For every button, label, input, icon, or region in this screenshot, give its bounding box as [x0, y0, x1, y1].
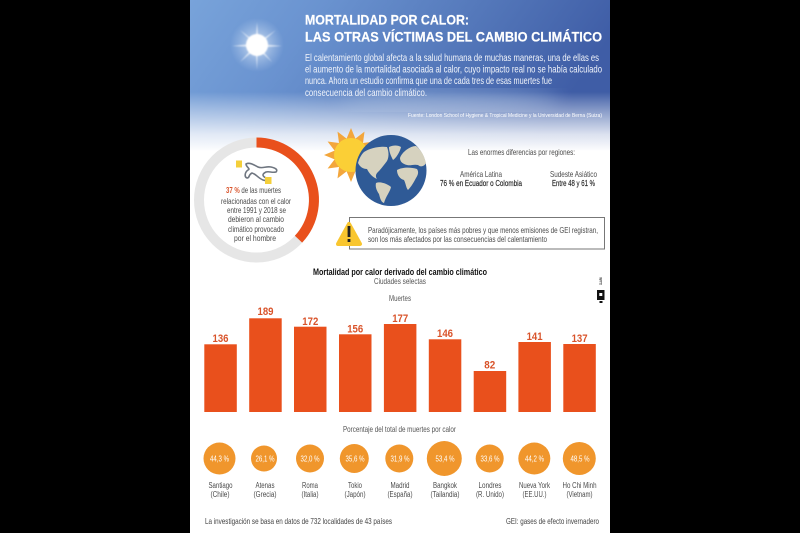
icon: globe — [356, 135, 426, 206]
bubble chart: percentage of heat deaths — [204, 441, 596, 499]
city labels: Atenas — [256, 481, 274, 490]
chart heading: Mortalidad por calor derivado del cambio climático — [313, 267, 487, 277]
bar values: 137 — [572, 333, 588, 345]
city labels: Tokio — [348, 481, 362, 490]
bar values: 156 — [347, 324, 363, 336]
donut caption: por el hombre — [234, 233, 276, 243]
intro text block: consecuencia del cambio climático. — [305, 87, 427, 99]
icon: sun and globe — [324, 128, 426, 206]
bar values: 82 — [484, 360, 495, 372]
chart heading: Ciudades selectas — [374, 276, 426, 286]
sky header panel — [190, 0, 610, 152]
donut caption: climático provocado — [228, 224, 284, 234]
source note: Fuente: London School of Hygiene & Tropical Medicine y la Universidad de Berna (Suiza) — [408, 113, 602, 119]
percentage heading: Porcentaje del total de muertes por calor — [343, 424, 456, 434]
bubble values: 31,9 % — [390, 454, 410, 464]
icon: sun in the sky — [230, 18, 284, 72]
city labels: (EE.UU.) — [522, 490, 547, 499]
bubble values: 44,3 % — [210, 454, 229, 464]
bubble values: 53,4 % — [436, 454, 454, 464]
footer note: methodology: La investigación se basa en datos de 732 localidades de 43 países — [205, 516, 392, 526]
region: América Latina: América Latina — [460, 169, 502, 179]
donut caption: entre 1991 y 2018 se — [227, 205, 286, 215]
bar values: 177 — [392, 313, 408, 325]
bubble values — [210, 454, 590, 464]
bar values: 146 — [437, 328, 453, 340]
bubble values: 33,6 % — [480, 454, 500, 464]
donut caption: relacionadas con el calor — [221, 196, 291, 206]
city labels: Roma — [302, 481, 318, 490]
chart heading — [313, 267, 487, 303]
bubble values: 26,1 % — [256, 454, 274, 464]
city labels: Ho Chi Minh — [562, 481, 596, 490]
bubble values: 48,5 % — [570, 454, 590, 464]
donut chart: 37 % — [199, 142, 314, 258]
bar values: 172 — [302, 316, 318, 328]
title: MORTALIDAD POR CALOR: — [305, 12, 469, 28]
intro text block: nunca. Ahora un estudio confirma que una de cada tres de esas muertes fue — [305, 75, 552, 87]
icon: sun — [324, 128, 378, 182]
intro text block — [305, 52, 602, 99]
callout text: son los más afectados por las consecuencias del calentamiento — [368, 234, 547, 244]
icon: warning triangle — [338, 224, 360, 244]
intro text block: El calentamiento global afecta a la salud humana de muchas maneras, una de ellas es — [305, 52, 599, 64]
title — [305, 12, 602, 44]
footer note: GEI definition: GEI: gases de efecto invernadero — [506, 516, 599, 526]
city labels: (Grecia) — [254, 490, 277, 499]
city labels: Santiago — [208, 481, 233, 490]
city labels: Madrid — [390, 481, 410, 490]
bubble values: 32,0 % — [300, 454, 320, 464]
city labels: (Italia) — [302, 490, 319, 499]
bar values — [212, 306, 588, 372]
city labels: Londres — [478, 481, 502, 490]
city labels: Bangkok — [433, 481, 458, 490]
bubble values: 44,2 % — [525, 454, 544, 464]
city labels: (R. Unido) — [476, 490, 504, 499]
bar values: 141 — [527, 331, 543, 343]
logo mark — [597, 277, 604, 303]
page background panel — [190, 0, 610, 533]
chart heading: Muertes — [389, 293, 411, 303]
region: Sudeste Asiático: Entre 48 y 61 % — [552, 178, 595, 188]
donut caption — [221, 185, 291, 243]
bar values: 189 — [258, 306, 274, 318]
donut caption: debieron al cambio — [228, 214, 284, 224]
city labels: (Vietnam) — [566, 490, 593, 499]
icon: body outline with evidence markers — [236, 160, 277, 184]
bar chart: deaths — [204, 306, 596, 412]
city labels: (Tailandia) — [430, 490, 460, 499]
callout text — [368, 225, 598, 244]
logo mark: CLARK — [598, 277, 603, 285]
title: LAS OTRAS VÍCTIMAS DEL CAMBIO CLIMÁTICO — [305, 28, 602, 44]
city labels: Nueva York — [519, 481, 551, 490]
city labels: (España) — [388, 490, 413, 499]
region: Sudeste Asiático: Sudeste Asiático — [550, 169, 597, 179]
intro text block: el aumento de la mortalidad asociada al calor, cuyo impacto real no se había calculado — [305, 64, 602, 76]
city labels: (Chile) — [210, 490, 230, 499]
donut caption: 37 % de las muertes — [226, 185, 281, 195]
city labels — [208, 481, 596, 499]
region: América Latina: 76 % en Ecuador o Colombia — [440, 178, 522, 188]
regional differences: Las enormes diferencias por regiones: — [468, 147, 575, 157]
callout text: Paradójicamente, los países más pobres y que menos emisiones de GEI registran, — [368, 225, 598, 235]
city labels: (Japón) — [344, 490, 366, 499]
callout: paradox warning — [338, 218, 604, 249]
bar values: 136 — [212, 333, 228, 345]
bubble values: 35,6 % — [346, 454, 364, 464]
region: América Latina — [440, 169, 522, 188]
region: Sudeste Asiático — [550, 169, 597, 188]
regional differences — [440, 147, 597, 188]
